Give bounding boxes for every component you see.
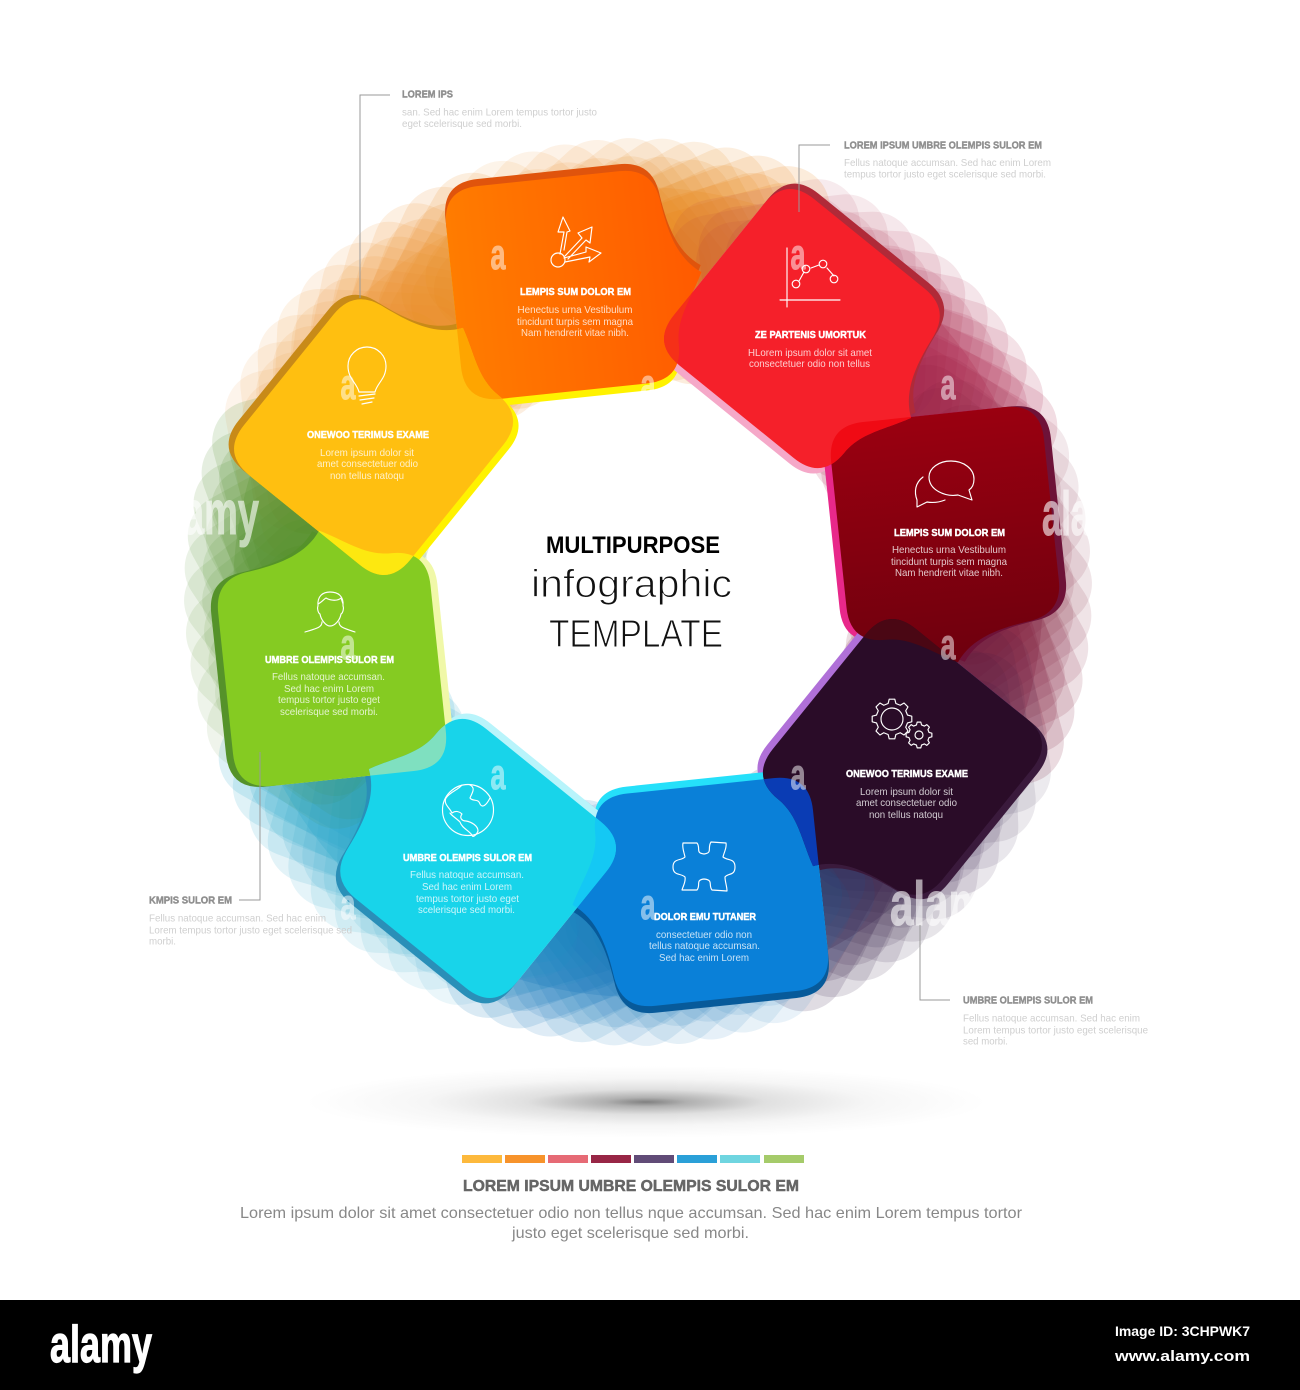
- panel: cyan tile content: [403, 784, 532, 916]
- icon: speech bubbles: [915, 461, 974, 507]
- heading: LEMPIS SUM DOLOR EM: [520, 286, 631, 298]
- panel: blue tile content: [649, 842, 760, 964]
- callout: top right: Fellus natoque accumsan. Sed hac enim Lorem: [844, 157, 1051, 169]
- heading: ONEWOO TERIMUS EXAME: [307, 429, 429, 441]
- text: [891, 544, 1007, 579]
- panel: yellow tile content: [307, 347, 429, 482]
- text: Nam hendrerit vitae nibh.: [521, 327, 629, 339]
- panel: green tile content: [265, 592, 394, 718]
- text: tempus tortor justo eget: [416, 893, 519, 905]
- text: Fellus natoque accumsan.: [410, 869, 524, 881]
- text: Sed hac enim Lorem: [659, 952, 749, 964]
- watermark fragments: a: [790, 231, 806, 279]
- text: tempus tortor justo eget: [278, 694, 380, 706]
- heading: ZE PARTENIS UMORTUK: [755, 329, 866, 341]
- panel: red tile content: [748, 248, 872, 370]
- tile shapes: squares: [211, 164, 1066, 1013]
- text: [410, 869, 524, 916]
- text: non tellus natoqu: [869, 809, 943, 821]
- watermark fragments: a: [340, 361, 356, 409]
- title block: [531, 532, 732, 656]
- text: [317, 447, 418, 482]
- icon: branching arrows: [551, 217, 601, 267]
- text: Lorem ipsum dolor sit: [860, 786, 953, 798]
- text: Lorem ipsum dolor sit: [320, 447, 414, 459]
- callout: bottom right: Lorem tempus tortor justo eget scelerisque: [963, 1024, 1148, 1036]
- callout: bottom left: Lorem tempus tortor justo eget scelerisque sed: [149, 924, 352, 936]
- callout: top left: [360, 90, 597, 298]
- translucent fan ring behind the tiles: [37, 0, 1239, 1193]
- logo: alamy: [50, 1316, 152, 1374]
- watermark fragments: a: [940, 361, 956, 409]
- heading: LEMPIS SUM DOLOR EM: [894, 527, 1005, 539]
- text: [517, 304, 633, 339]
- text: [649, 929, 760, 964]
- callout: top left: san. Sed hac enim Lorem tempus tortor justo: [402, 106, 597, 118]
- callout: bottom right: Fellus natoque accumsan. Sed hac enim: [963, 1012, 1140, 1024]
- text: Fellus natoque accumsan.: [272, 671, 385, 683]
- callout: top left: eget scelerisque sed morbi.: [402, 118, 522, 130]
- footer text: [240, 1205, 1023, 1242]
- watermark fragments: a: [340, 881, 356, 929]
- callout: top right: [799, 140, 1051, 212]
- panel: orange tile content: [517, 217, 633, 339]
- text: tellus natoque accumsan.: [649, 940, 760, 952]
- panel: maroon tile content: [891, 461, 1007, 579]
- footer text: justo eget scelerisque sed morbi.: [511, 1225, 749, 1242]
- watermark fragments: ala: [1042, 480, 1090, 549]
- text: scelerisque sed morbi.: [418, 904, 515, 916]
- heading: UMBRE OLEMPIS SULOR EM: [265, 654, 394, 666]
- text: HLorem ipsum dolor sit amet: [748, 347, 872, 359]
- heading: DOLOR EMU TUTANER: [654, 911, 756, 923]
- text: Nam hendrerit vitae nibh.: [895, 567, 1003, 579]
- watermark fragments: a: [640, 361, 656, 409]
- text: scelerisque sed morbi.: [280, 706, 378, 718]
- watermark fragments: a: [490, 751, 506, 799]
- footer heading: LOREM IPSUM UMBRE OLEMPIS SULOR EM: [463, 1178, 799, 1195]
- text: amet consectetuer odio: [856, 797, 957, 809]
- callout: bottom right: UMBRE OLEMPIS SULOR EM: [963, 996, 1093, 1006]
- callout: top right: LOREM IPSUM UMBRE OLEMPIS SULOR EM: [844, 140, 1042, 152]
- text: Henectus urna Vestibulum: [518, 304, 633, 316]
- watermark fragments: a: [940, 621, 956, 669]
- watermark fragments: a: [790, 751, 806, 799]
- text: tincidunt turpis sem magna: [891, 556, 1007, 568]
- text: tincidunt turpis sem magna: [517, 316, 633, 328]
- text: Henectus urna Vestibulum: [892, 544, 1006, 556]
- subtitle: infographic: infographic: [531, 563, 732, 606]
- text: consectetuer odio non: [656, 929, 752, 941]
- translucent overlaps between neighbouring tiles: [304, 230, 974, 908]
- heading: multipurpose: MULTIPURPOSE: [546, 532, 720, 559]
- callout: bottom left: KMPIS SULOR EM: [149, 896, 232, 906]
- callout: bottom right: [920, 925, 1148, 1048]
- heading: ONEWOO TERIMUS EXAME: [846, 768, 968, 780]
- drop shadow under ring: [306, 1066, 986, 1138]
- watermark fragments: a: [490, 231, 506, 279]
- icon: gears: [872, 699, 932, 748]
- watermark fragments: [183, 231, 1090, 939]
- text: Sed hac enim Lorem: [422, 881, 512, 893]
- callout: bottom left: [149, 752, 352, 948]
- image id: Image ID: 3CHPWK7: [1115, 1323, 1250, 1339]
- callout: top right: tempus tortor justo eget scelerisque sed morbi.: [844, 168, 1046, 180]
- text: [748, 347, 872, 370]
- heading: UMBRE OLEMPIS SULOR EM: [403, 852, 532, 864]
- watermark fragments: alam: [890, 870, 986, 939]
- text: [856, 786, 957, 821]
- callout: top left: LOREM IPS: [402, 90, 453, 100]
- icon: line chart: [780, 248, 840, 307]
- text: Sed hac enim Lorem: [284, 683, 374, 695]
- tile shapes: diamonds: [222, 177, 1054, 1010]
- watermark fragments: a: [640, 881, 656, 929]
- text: non tellus natoqu: [330, 470, 404, 482]
- callout: bottom left: Fellus natoque accumsan. Sed hac enim: [149, 912, 326, 924]
- callout: bottom left: morbi.: [149, 936, 176, 948]
- url: www.alamy.com: [1114, 1348, 1250, 1365]
- icon: light bulb: [348, 347, 386, 404]
- watermark fragments: amy: [183, 479, 259, 548]
- text: consectetuer odio non tellus: [749, 358, 870, 370]
- subtitle: template: TEMPLATE: [549, 613, 723, 656]
- text: [272, 671, 385, 718]
- icon: globe: [442, 784, 494, 836]
- footer text: Lorem ipsum dolor sit amet consectetuer odio non tellus nque accumsan. Sed hac enim Lorem tempus tortor: [240, 1205, 1023, 1222]
- icon: puzzle piece: [673, 842, 735, 891]
- watermark fragments: a: [340, 621, 356, 669]
- colour legend bars: [462, 1155, 804, 1163]
- tile rims: dark outer and bright inner edges: [204, 157, 1073, 1020]
- callout: bottom right: sed morbi.: [963, 1036, 1008, 1048]
- watermark footer bar: [0, 1300, 1300, 1390]
- text: amet consectetuer odio: [317, 458, 418, 470]
- icon: person: [305, 592, 355, 632]
- panel: dark purple tile content: [846, 699, 968, 821]
